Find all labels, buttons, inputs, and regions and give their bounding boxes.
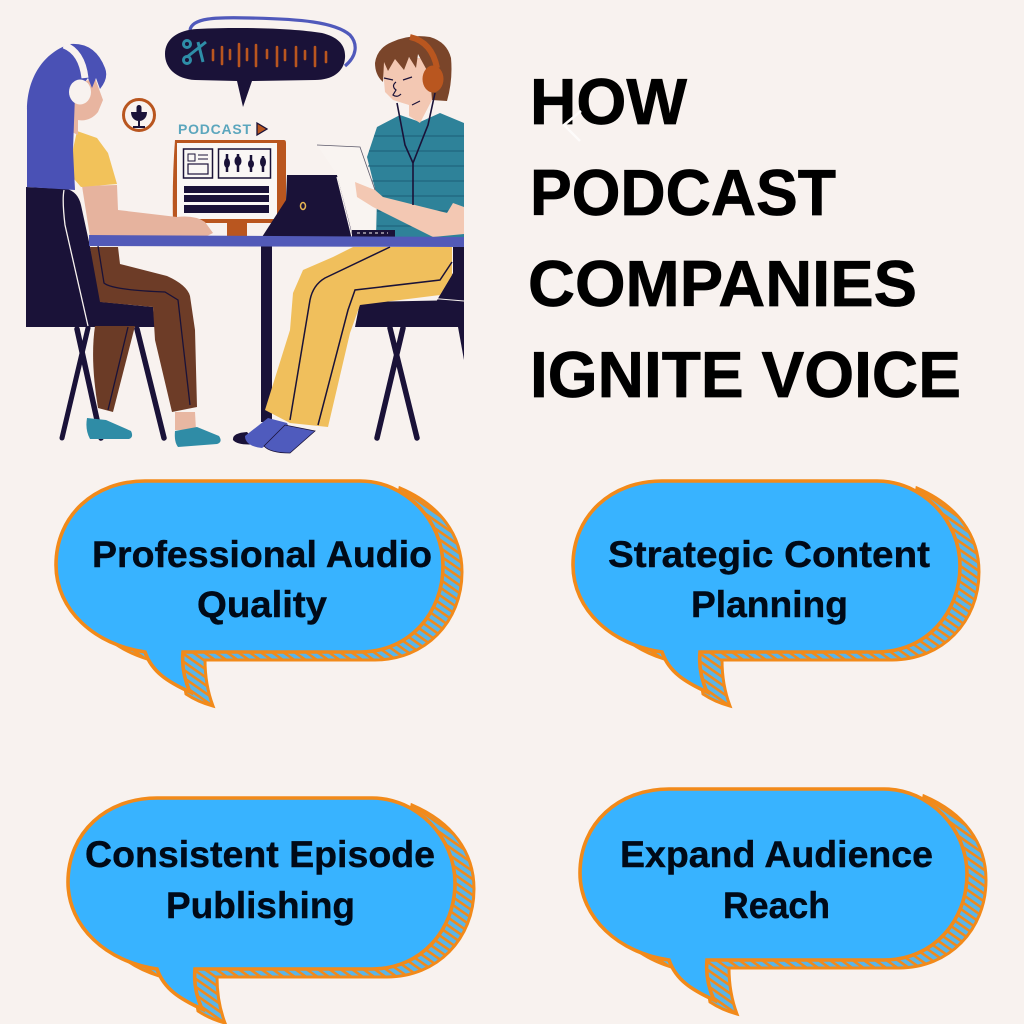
- podcast label: PODCAST: [178, 121, 251, 137]
- shoes: [233, 418, 315, 453]
- arm: [82, 185, 213, 237]
- callout: expand audience reach: Expand Audience: [620, 834, 933, 875]
- chair legs: [77, 329, 164, 438]
- feet: [86, 412, 221, 447]
- trousers: [265, 247, 452, 427]
- callout: strategic content planning: Planning: [691, 584, 848, 625]
- icon: microphone badge: [124, 100, 154, 130]
- title mark: [564, 111, 581, 141]
- callout: professional audio quality: Professional Audio: [92, 534, 432, 575]
- headphones: [410, 37, 444, 92]
- person: right man: [233, 36, 464, 453]
- face: [72, 78, 103, 135]
- chair highlight: [63, 190, 88, 326]
- speech bubble with waveform: [165, 18, 355, 107]
- trousers: [90, 246, 197, 412]
- cables: [397, 93, 435, 205]
- table: [89, 235, 464, 247]
- shirt: [68, 131, 117, 187]
- title line 3: COMPANIES: [528, 248, 917, 320]
- person: left woman: [26, 44, 221, 447]
- chair: [26, 187, 155, 438]
- headphones: [64, 45, 91, 104]
- paper: [317, 145, 375, 230]
- chair: [355, 247, 464, 438]
- callout: professional audio quality: Quality: [197, 584, 327, 625]
- forearm and hand: [355, 182, 464, 237]
- illustration: two people recording a podcast: [26, 18, 464, 453]
- table leg: [261, 246, 272, 422]
- title line 4: IGNITE VOICE: [530, 339, 961, 411]
- callout: professional audio quality: [56, 481, 462, 706]
- callout: consistent episode publishing: Publishing: [166, 885, 355, 926]
- title line 1: HOW: [530, 66, 687, 138]
- callout: expand audience reach: Reach: [723, 885, 830, 926]
- callout: consistent episode publishing: Consistent Episode: [85, 834, 435, 875]
- shirt: [367, 113, 464, 237]
- title line 2: PODCAST: [530, 157, 836, 229]
- hair: [27, 44, 106, 190]
- laptop: [262, 175, 353, 237]
- callout: strategic content planning: Strategic Content: [608, 534, 930, 575]
- callout: expand audience reach: [580, 789, 986, 1014]
- title: [528, 66, 961, 411]
- laptop keyboard: [352, 230, 395, 237]
- callout: consistent episode publishing: [68, 798, 474, 1023]
- neck and face: [382, 58, 433, 123]
- monitor: [173, 140, 286, 237]
- hair: [375, 36, 452, 101]
- callout: strategic content planning: [573, 481, 979, 706]
